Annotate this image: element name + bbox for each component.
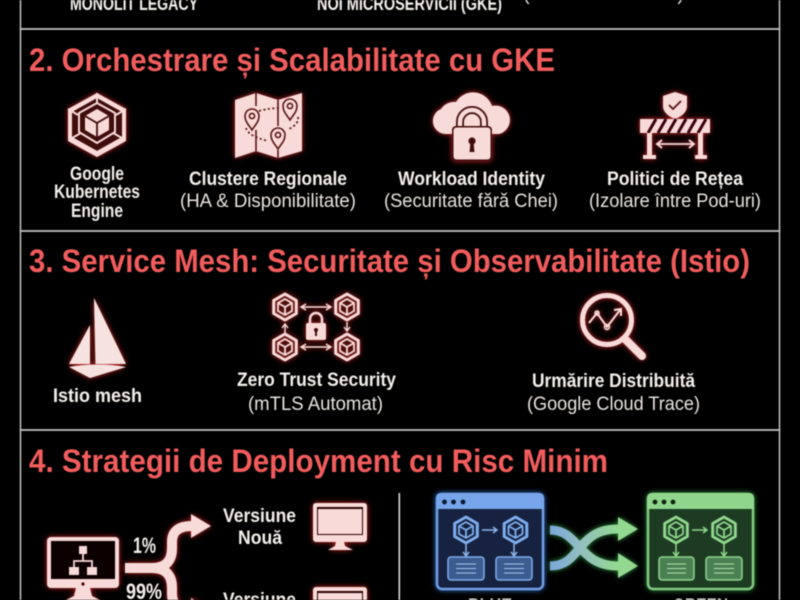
icon: source monitor <box>47 537 119 600</box>
label: 1%: 1% <box>133 533 156 558</box>
item: Zero Trust Security <box>237 294 396 415</box>
icon: magnifier trace <box>582 296 642 356</box>
label: (Izolare între Pod-uri) <box>589 190 761 212</box>
icon: GKE hexagon <box>68 93 126 157</box>
label: new version: Nouă <box>238 527 282 549</box>
item: Workload Identity <box>384 92 558 212</box>
icon: map with pins <box>235 93 302 158</box>
group: canary deployment <box>47 503 367 600</box>
icon: green window <box>647 493 754 589</box>
item: Politici de Rețea <box>589 92 761 212</box>
icon: barrier and shield <box>640 92 710 159</box>
label <box>180 168 356 212</box>
item: Google Kubernetes Engine <box>54 93 140 222</box>
label: Kubernetes <box>54 181 140 203</box>
label: Zero Trust Security <box>237 369 396 391</box>
panel: 3 Service Mesh <box>20 231 780 430</box>
label <box>54 163 140 222</box>
label: Google <box>70 163 124 185</box>
label: new version <box>223 505 296 549</box>
item: Istio mesh <box>53 298 142 407</box>
item: Urmărire Distribuită <box>527 296 700 415</box>
icon: new version monitor <box>313 503 367 550</box>
icon: Istio sail <box>69 298 126 378</box>
label: Istio mesh <box>53 385 142 407</box>
label: (HA & Disponibilitate) <box>180 190 356 212</box>
heading 4: 4. Strategii de Deployment cu Risc Minim <box>29 443 608 479</box>
icon: mTLS hexagon mesh <box>274 294 358 360</box>
panel: 1 migration (clipped) <box>20 0 780 29</box>
label: Urmărire Distribuită <box>532 370 695 392</box>
label: Clustere Regionale <box>189 168 347 190</box>
icon: cloud lock <box>433 92 510 161</box>
arrow: blue to green switch <box>550 517 638 578</box>
heading 3: 3. Service Mesh: Securitate și Observabilitate (Istio) <box>29 243 750 279</box>
heading 2: 2. Orchestrare și Scalabilitate cu GKE <box>29 42 555 78</box>
label <box>384 168 558 212</box>
item: Clustere Regionale <box>180 93 356 212</box>
label: new version: Versiune <box>223 505 296 527</box>
label: (mTLS Automat) <box>248 393 383 415</box>
icon: blue window <box>436 493 544 589</box>
arrow: traffic split <box>125 514 211 600</box>
label <box>589 168 761 212</box>
panel: 4 Deployment <box>20 430 780 600</box>
label: (Google Cloud Trace) <box>527 393 700 415</box>
label: (Securitate fără Chei) <box>384 190 558 212</box>
group: blue-green deployment <box>436 493 754 600</box>
label: Workload Identity <box>398 168 545 190</box>
label: Engine <box>71 200 123 222</box>
label <box>237 369 396 415</box>
panel: 2 GKE <box>20 29 780 231</box>
label <box>527 370 700 415</box>
icon: stable version monitor <box>313 587 367 600</box>
label: Politici de Rețea <box>607 168 743 190</box>
